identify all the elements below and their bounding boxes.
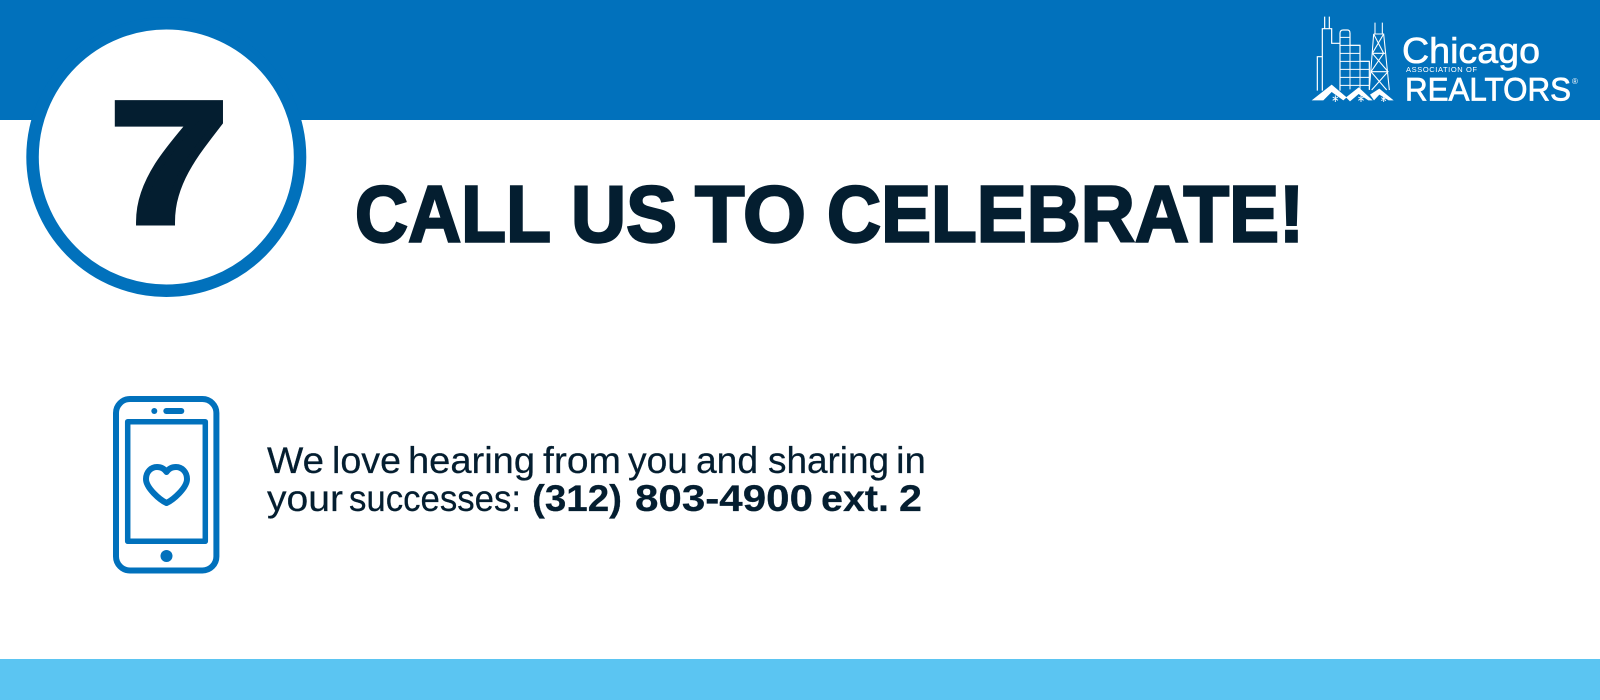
logo wordmark: ® — [1572, 77, 1578, 86]
number badge: 7 — [110, 67, 228, 259]
title: CELEBRATE! — [827, 170, 1304, 258]
logo wordmark: REALTORS — [1405, 72, 1571, 108]
number badge — [33, 23, 300, 291]
title — [355, 170, 1304, 258]
logo wordmark: ASSOCIATION OF — [1406, 65, 1477, 74]
title: US — [571, 170, 677, 258]
logo: Chicago Association of Realtors — [1312, 17, 1578, 107]
logo wordmark: Chicago — [1402, 30, 1540, 71]
bottom light blue band — [0, 659, 1600, 700]
logo wordmark — [1402, 30, 1578, 108]
body text: sharing — [768, 440, 889, 481]
body text: 2 — [899, 478, 922, 519]
title: CALL — [355, 170, 551, 258]
body text: in — [896, 440, 926, 481]
body text: (312) — [532, 478, 622, 519]
body text: your — [267, 478, 343, 519]
top header bar — [0, 0, 1600, 120]
body text: successes: — [349, 478, 521, 519]
icon: smartphone with heart — [116, 399, 216, 570]
body text: ext. — [821, 478, 889, 519]
body text: hearing — [408, 440, 535, 481]
body text: 803-4900 — [635, 478, 813, 519]
body text: We — [267, 440, 324, 481]
title: TO — [695, 170, 806, 258]
body text: you — [628, 440, 688, 481]
body text: and — [696, 440, 758, 481]
logo icon: skyline with rooftops — [1312, 17, 1394, 102]
body text: from — [543, 440, 621, 481]
body text: love — [332, 440, 401, 481]
body text — [267, 440, 926, 519]
